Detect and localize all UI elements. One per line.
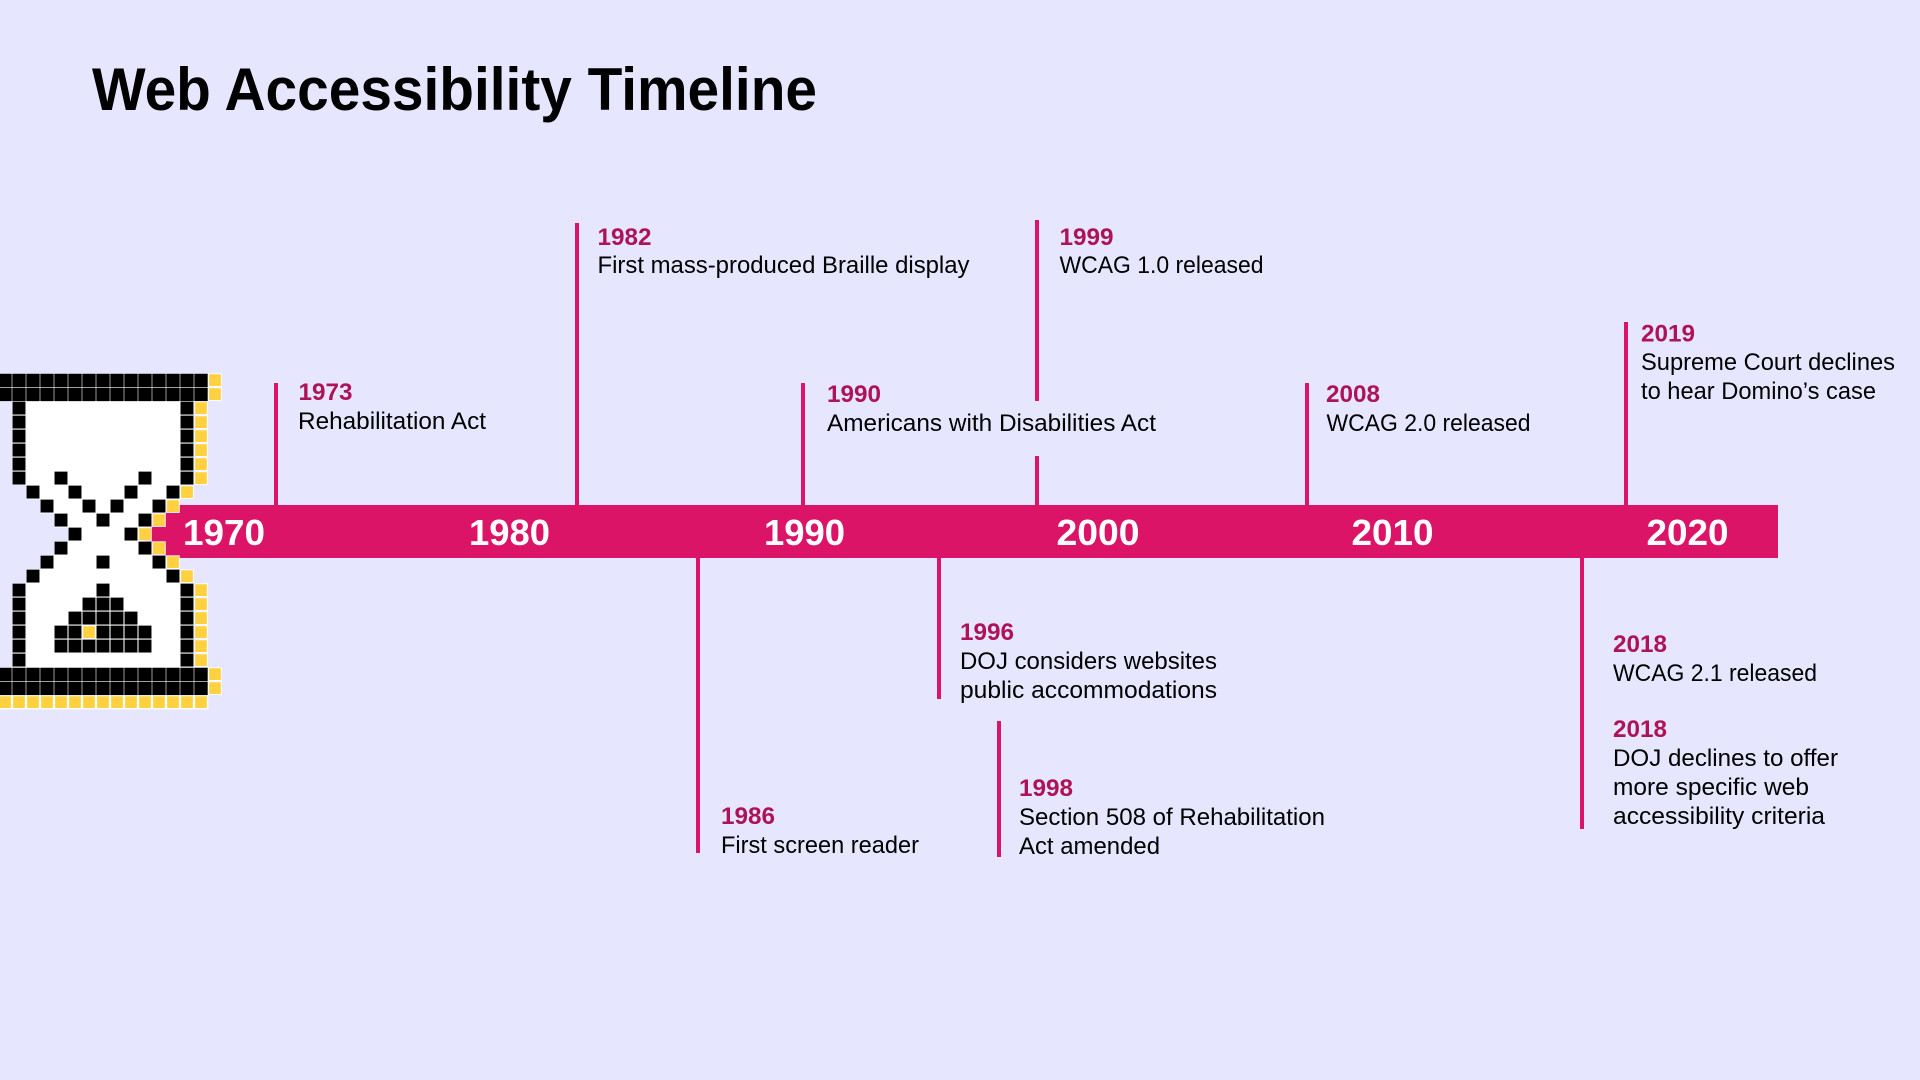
events: 2018 WCAG 2.1 and DOJ criteria: 2018 [1613,631,1667,658]
event: 2008 WCAG 2.0 released: 2008 [1326,381,1380,408]
event: 1998 Section 508 amended: Section 508 of Rehabilitation [1019,804,1325,831]
events: 2018 WCAG 2.1 and DOJ criteria [1580,555,1838,830]
event: 1982 Braille display: 1982 [598,224,652,251]
event: 1999 WCAG 1.0 released: WCAG 1.0 released [1060,252,1264,279]
event: 1982 Braille display [575,223,970,508]
event: 1982 Braille display: First mass-produced Braille display [598,252,970,279]
event: 1996 DOJ considers websites public accommodations: public accommodations [960,677,1217,704]
event: 1998 Section 508 amended: 1998 [1019,775,1073,802]
event: 1999 WCAG 1.0 released: 1999 [1060,224,1114,251]
timeline bar: 1990 [764,512,845,553]
event: 1990 Americans with Disabilities Act [801,381,1156,508]
event: 1973 Rehabilitation Act: 1973 [298,379,352,406]
events: 2018 WCAG 2.1 and DOJ criteria: WCAG 2.1 released [1613,660,1817,687]
event: 1996 DOJ considers websites public accommodations: 1996 [960,619,1014,646]
events: 2018 WCAG 2.1 and DOJ criteria: 2018 [1613,716,1667,743]
event: 1999 WCAG 1.0 released [1035,220,1264,508]
event: 2019 Supreme Court declines: Supreme Court declines [1641,349,1895,376]
timeline bar: 1970 [183,512,265,553]
event: 1996 DOJ considers websites public accommodations: DOJ considers websites [960,648,1217,675]
event: 2019 Supreme Court declines: to hear Domino’s case [1641,378,1876,405]
timeline bar: 2010 [1352,512,1434,553]
event: 1996 DOJ considers websites public accommodations [937,555,1217,704]
event: 2008 WCAG 2.0 released: WCAG 2.0 released [1326,410,1530,437]
event: 1986 First screen reader [696,555,919,859]
event: 2019 Supreme Court declines: 2019 [1641,320,1695,348]
timeline bar: 1980 [469,512,550,553]
event: 1990 Americans with Disabilities Act: Americans with Disabilities Act [827,410,1156,437]
timeline bar: 2020 [1646,512,1728,553]
timeline bar [145,505,1778,558]
title: Web Accessibility Timeline [92,56,817,123]
event: 1986 First screen reader: 1986 [721,803,775,830]
event: 2019 Supreme Court declines [1624,320,1895,508]
events: 2018 WCAG 2.1 and DOJ criteria: accessibility criteria [1613,803,1826,830]
event: 1990 Americans with Disabilities Act: 1990 [827,381,881,408]
event: 1973 Rehabilitation Act: Rehabilitation Act [298,408,486,435]
events: 2018 WCAG 2.1 and DOJ criteria: DOJ declines to offer [1613,745,1838,772]
event: 1998 Section 508 amended [997,721,1325,860]
event: 2008 WCAG 2.0 released [1305,381,1530,508]
event: 1998 Section 508 amended: Act amended [1019,833,1160,860]
event: 1986 First screen reader: First screen reader [721,832,919,859]
events: 2018 WCAG 2.1 and DOJ criteria: more specific web [1613,774,1809,801]
timeline bar: 2000 [1056,512,1140,553]
event: 1973 Rehabilitation Act [274,379,486,508]
icon: pixel hourglass [0,373,221,709]
